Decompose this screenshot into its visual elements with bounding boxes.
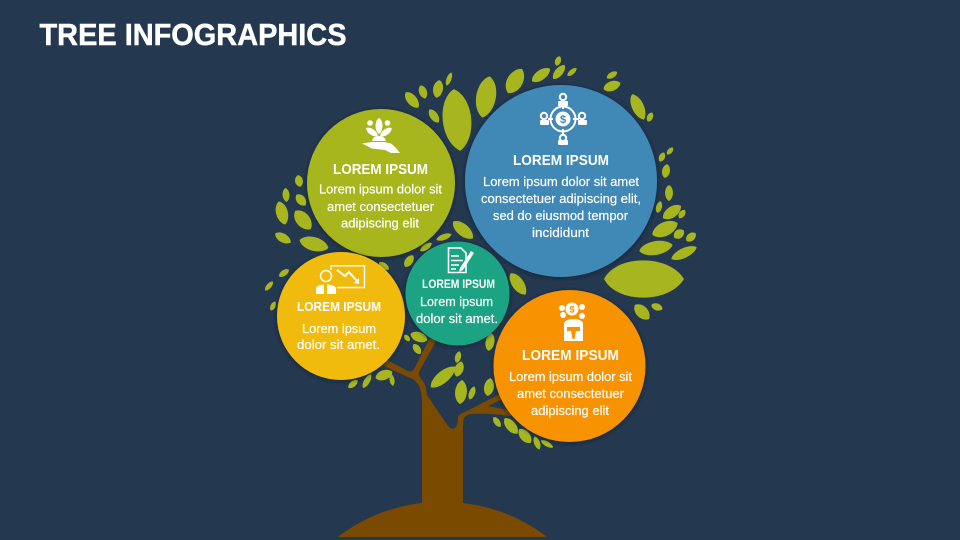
icon: people around dollar — [540, 94, 587, 145]
icon: person with money ideas: $ — [569, 304, 575, 314]
heading: LOREM IPSUM — [333, 162, 428, 178]
text block: consectetuer adipiscing elit, — [481, 191, 641, 206]
text block: adipiscing elit — [531, 403, 609, 418]
text block: Lorem ipsum — [420, 294, 493, 309]
icon: document and pen — [448, 248, 474, 272]
panel: teal circle — [406, 242, 510, 346]
text block: amet consectetuer — [517, 386, 625, 401]
tree trunk, branches and mound — [338, 338, 547, 537]
text block: amet consectetuer — [327, 199, 435, 214]
text block: Lorem ipsum — [302, 321, 376, 336]
panel: orange circle — [494, 290, 646, 442]
icon: person with money ideas — [559, 302, 585, 341]
text block — [481, 174, 641, 240]
heading: LOREM IPSUM — [513, 153, 609, 169]
text block: sed do eiusmod tempor — [493, 208, 629, 223]
leaves: tree canopy — [263, 55, 699, 451]
text block — [319, 182, 442, 230]
text block — [416, 294, 498, 326]
text block — [297, 321, 380, 352]
title: TREE INFOGRAPHICS — [40, 17, 346, 52]
icon: hand holding plant — [362, 118, 400, 153]
panel: yellow circle — [277, 252, 405, 380]
text block — [509, 369, 632, 418]
text block: Lorem ipsum dolor sit — [509, 369, 632, 384]
heading: LOREM IPSUM — [297, 299, 381, 314]
panel: blue circle — [465, 85, 657, 277]
icon: presenter with falling chart — [316, 266, 364, 294]
text block: dolor sit amet. — [297, 337, 380, 352]
panel: green circle — [307, 109, 455, 257]
heading: LOREM IPSUM — [522, 348, 619, 364]
heading: LOREM IPSUM — [422, 279, 495, 291]
text block: Lorem ipsum dolor sit amet — [483, 174, 639, 189]
text block: dolor sit amet. — [416, 311, 498, 326]
icon: people around dollar: $ — [560, 114, 566, 126]
text block: adipiscing elit — [341, 216, 419, 230]
text block: Lorem ipsum dolor sit — [319, 182, 442, 196]
text block: incididunt — [532, 225, 589, 240]
